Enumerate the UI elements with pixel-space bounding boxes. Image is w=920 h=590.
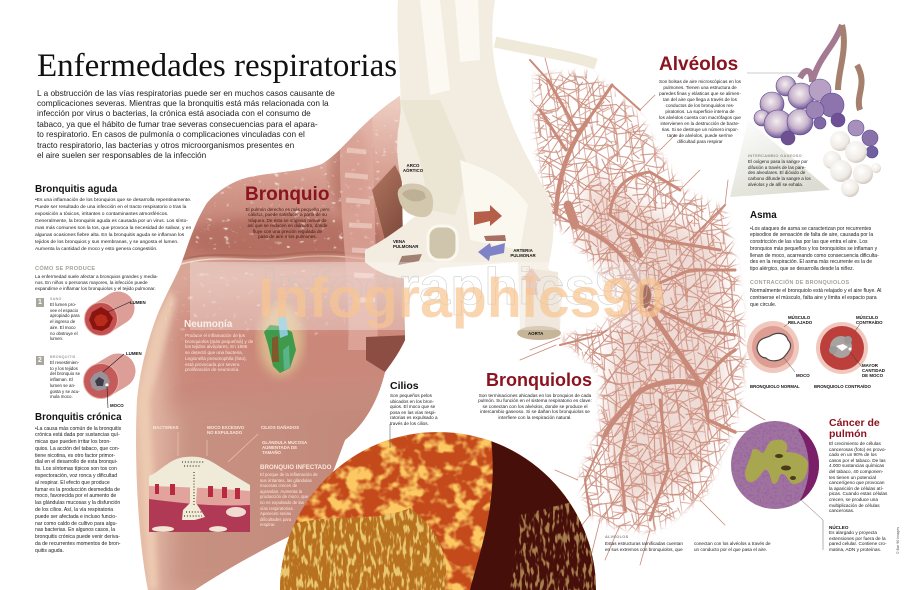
label: arco aortico: AÓRTICO bbox=[403, 168, 423, 173]
text: alveolos: Son bolsas de aire microscópicas en los bbox=[659, 79, 741, 84]
text: neumonia: los tejidos alveolares. En 1886 bbox=[185, 344, 247, 349]
text: contraccion bbox=[750, 288, 882, 308]
text: bronquio infectado: mucosas crecen de bbox=[260, 483, 297, 488]
text: intercambio gaseoso: carbono difunde la sangre a los bbox=[748, 176, 811, 181]
text: bronquitis aguda: •Es una inflamación de los bronquios que se desarrolla repentinamente. bbox=[35, 198, 191, 203]
text: bronquitis cronica: fumar es la producción desmedida de bbox=[35, 487, 120, 493]
label: bronquiolo contraido: BRONQUIOLO CONTRAÍDO bbox=[814, 384, 871, 389]
text: alveolos bbox=[659, 79, 741, 144]
text: cancer de pulmon bbox=[829, 441, 888, 513]
text: bronquio infectado: vías respiratorias. bbox=[260, 506, 294, 511]
text: bronquitis cronica: de los cilios. Así, la vía respiratoria bbox=[35, 507, 113, 513]
text: alveolos: paredes finas y elásticas que se alimen- bbox=[659, 91, 741, 96]
text: neumonia: bronquiolos (más pequeños) y de bbox=[185, 339, 253, 344]
intro paragraph: el aire suelen ser responsables de la infección bbox=[37, 151, 206, 160]
text: nucleo: matina, ADN y proteínas. bbox=[829, 547, 881, 552]
text: alveolos: pulmones. Tienen una estructura de bbox=[663, 85, 737, 90]
step 1: no obstruye el bbox=[50, 331, 78, 336]
text: cancer de pulmon: cancerígeno que provocan bbox=[829, 480, 885, 485]
text: bronquiolos: pulmón. Su función en el sistema respiratorio es clave: bbox=[478, 398, 592, 403]
heading: bronquitis cronica: Bronquitis crónica bbox=[35, 412, 122, 423]
text: bronquitis cronica: tiene nicotina, es otro factor primor- bbox=[35, 453, 115, 459]
bronchus tube 2: inflamed bbox=[84, 354, 124, 408]
heading: como se produce: CÓMO SE PRODUCE bbox=[35, 266, 95, 272]
heading: bronquio infectado: BRONQUIO INFECTADO bbox=[260, 464, 331, 471]
step 2: inflaman. El bbox=[50, 377, 73, 382]
step 1: 1 bbox=[38, 299, 42, 306]
text: bronquitis aguda: tejidos de los bronquios y sus membranas, y se angosta el lumen. bbox=[35, 240, 178, 245]
bronchus tube 1: healthy bbox=[84, 302, 130, 336]
text: alveolos: tante de alvéolos, puede ser/me bbox=[667, 133, 733, 138]
text: como se produce: nos. En niños o personas mayores, la infección puede bbox=[35, 280, 148, 285]
label: glandula mucosa: AUMENTADA DE bbox=[262, 445, 297, 450]
text: alveolos: conductos de los bronquiolos res- bbox=[666, 103, 734, 108]
text: bronquio infectado: no es expulsado de las bbox=[260, 500, 304, 505]
text: cancer de pulmon: El crecimiento de células bbox=[829, 441, 881, 446]
text: bronquitis aguda: exposición a tóxicos, irritantes o contaminantes atmosféricos. bbox=[35, 212, 168, 217]
text: bronquitis cronica: tis. Los síntomas típicos son tos con bbox=[35, 466, 117, 472]
text: como se produce: La enfermedad suele afectar a bronquios grandes y media- bbox=[35, 274, 158, 279]
text: bronquitis cronica: crónica está dada por sustancias quí- bbox=[35, 432, 120, 438]
text: intercambio gaseoso bbox=[748, 159, 811, 187]
text: bronquitis cronica: quios. La acción del tabaco, que con- bbox=[35, 446, 119, 452]
label: mayor cantidad de moco bbox=[862, 363, 885, 378]
text: nucleo: pared celular. Contiene cro- bbox=[829, 541, 887, 546]
gas exchange callout panel bbox=[730, 120, 830, 197]
label: musculo contraido bbox=[856, 314, 883, 325]
text: bronquio: paso de aire a los pulmones. bbox=[258, 234, 317, 239]
label: moco excesivo: MOCO EXCESIVO bbox=[207, 425, 244, 430]
label: musculo relajado: RELAJADO bbox=[788, 320, 812, 325]
text: contraccion: contraerse el músculo, falta aire y limita el espacio para bbox=[750, 294, 877, 300]
text: bronquitis aguda: Generalmente, la bronquitis aguda es causada por un virus. Los sínto- bbox=[35, 219, 188, 224]
text: nucleo: Es alargado y proyecta bbox=[829, 530, 877, 535]
text: asma: •Los ataques de asma se caracterizan por recurrentes bbox=[750, 226, 871, 232]
text: cilios: ubicados en los bron- bbox=[390, 399, 434, 404]
text: bronquio: tráquea. De ésta se originan ramas de bbox=[248, 218, 327, 223]
text: bronquitis cronica: quitis aguda. bbox=[35, 548, 64, 554]
text: neumonia bbox=[185, 333, 253, 372]
label: lumen 2: LUMEN bbox=[126, 350, 142, 356]
text: neumonia: proliferación de neumonía. bbox=[185, 367, 239, 372]
heading: cancer de pulmon bbox=[829, 417, 880, 440]
text: bronquitis aguda: mas más comunes son la tos, que provoca la necesidad de salivar, y en bbox=[35, 226, 191, 231]
text: bronquitis cronica: •La causa más común de la bronquitis bbox=[35, 426, 121, 432]
neumonia micrograph bbox=[259, 304, 303, 376]
text: alveolares column 2: conectan con los alvéolos a través de bbox=[694, 541, 771, 546]
text: alveolares column 2 bbox=[694, 541, 771, 552]
text: bronquitis cronica: puede ser afectada e incluso funcio- bbox=[35, 514, 117, 520]
text: bronquiolos: intercambio gaseoso. Si se dañan los bronquiolos se bbox=[480, 409, 590, 414]
label: musculo contraido: CONTRAÍDO bbox=[856, 320, 883, 325]
bronchiole contracted diagram bbox=[816, 322, 868, 374]
text: alveolos: intervienen en la destrucción de bacte- bbox=[661, 121, 739, 126]
text: bronquitis cronica: da de recurrentes momentos de bron- bbox=[35, 541, 121, 547]
text: bronquio: así que se reducen en diámetro, donde bbox=[248, 223, 327, 228]
label: moco: MOCO bbox=[110, 402, 124, 408]
intro paragraph: tracto respiratorio, las bacterias y otros microorganismos presentes en bbox=[37, 141, 294, 150]
label: bacterias: BACTERIAS bbox=[153, 425, 179, 430]
text: como se produce bbox=[35, 274, 158, 291]
intro paragraph: to respiratorio. En casos de pulmonía o complicaciones vinculadas con el bbox=[37, 130, 305, 139]
text: bronquio infectado: El porque de la inflamación de bbox=[260, 472, 318, 477]
text: bronquio: El pulmón derecho es más pequeño pero bbox=[245, 207, 330, 212]
step 2: El revestimien- bbox=[50, 360, 79, 365]
heading: bronquitis aguda: Bronquitis aguda bbox=[35, 184, 117, 195]
label: mayor cantidad de moco: CANTIDAD bbox=[862, 368, 885, 373]
step 1: SANO bbox=[50, 297, 62, 301]
intro paragraph: infección por virus o bacterias, la crónica está asociada con el consumo de bbox=[37, 109, 311, 118]
step 2: del bronquio se bbox=[50, 371, 80, 376]
step 2: BRONQUITIS bbox=[50, 355, 76, 359]
text: bronquio infectado: dificultades para bbox=[260, 517, 291, 522]
infected bronchus cross-section bbox=[149, 432, 258, 532]
label: mayor cantidad de moco: MAYOR bbox=[862, 363, 878, 368]
text: asma: constricción de las vías por las que entra el aire. Los bbox=[750, 239, 868, 245]
label: arco aortico: ARCO bbox=[407, 163, 419, 168]
text: cancer de pulmon: multiplicación de células bbox=[829, 503, 880, 508]
watermark: Infographics90 bbox=[262, 258, 657, 316]
cancer cell micrograph bbox=[731, 421, 823, 550]
label: moco excesivo: NO EXPULSADO bbox=[207, 430, 242, 435]
text: cilios: ratorias es expulsado a bbox=[390, 415, 438, 420]
label: cilios danados: CILIOS DAÑADOS bbox=[261, 425, 299, 430]
text: bronquitis aguda: Aumenta la cantidad de moco y esto genera congestión. bbox=[35, 247, 157, 252]
text: bronquitis cronica: moco, favorecida por el aumento de bbox=[35, 493, 116, 499]
label: arco aortico bbox=[403, 163, 423, 173]
step 1: lumen. bbox=[50, 336, 63, 341]
heading: neumonia: Neumonía bbox=[184, 319, 232, 330]
bronchiole tree bbox=[520, 58, 766, 566]
text: bronquiolos bbox=[478, 392, 592, 420]
label: moco asma: MOCO bbox=[796, 373, 810, 378]
text: asma bbox=[750, 226, 879, 272]
text: bronquio bbox=[245, 207, 330, 239]
text: alveolares column 1: Estas estructuras ramificadas cuentan bbox=[605, 541, 683, 546]
label: glandula mucosa: TAMAÑO bbox=[262, 450, 281, 455]
step 2: gosta y se acu- bbox=[50, 389, 80, 394]
intro paragraph: L a obstrucción de las vías respiratorias puede ser en muchos casos causante de bbox=[37, 88, 335, 98]
text: bronquiolos: Son terminaciones ahicadas en los bronquios de cada bbox=[479, 392, 591, 398]
text: cilios: Son pequeños pelos bbox=[390, 393, 432, 398]
text: bronquio infectado bbox=[260, 472, 318, 527]
text: nucleo: extensiones por fuera de la bbox=[829, 536, 886, 541]
intro paragraph bbox=[37, 88, 335, 160]
label: aorta: AORTA bbox=[528, 331, 543, 336]
text: asma: des en la respiración. El asma más recurrente es la de bbox=[750, 259, 872, 265]
label: arteria pulmonar: PULMONAR bbox=[510, 253, 536, 258]
alveoli cluster bbox=[754, 25, 881, 197]
text: bronquio infectado: agrandan. Aumenta la bbox=[260, 489, 302, 494]
text: cilios: quios. El moco que se bbox=[390, 404, 435, 409]
text: bronquio infectado: respirar. bbox=[260, 522, 276, 527]
text: bronquitis cronica: nas bacterias. En algunos casos, la bbox=[35, 527, 115, 533]
text: asma: episodios de sensación de falta de aire, causada por la bbox=[750, 232, 873, 238]
step 2 bbox=[36, 355, 80, 399]
label: musculo relajado bbox=[788, 314, 812, 325]
step 2: lumen se an- bbox=[50, 383, 75, 388]
bronchiole normal diagram bbox=[747, 321, 799, 373]
text: alveolos: los alvéolos cuenta con macrófagos que bbox=[659, 115, 741, 120]
text: intercambio gaseoso: alvéolos y de allí se exhala. bbox=[748, 182, 803, 187]
text: neumonia: Produce el inflamación de los bbox=[185, 333, 245, 338]
watermark band bbox=[190, 262, 640, 330]
text: bronquitis cronica: micas que pueden irritar los bron- bbox=[35, 439, 111, 445]
title: Enfermedades respiratorias bbox=[37, 48, 397, 84]
text: bronquio infectado: sus irritantes, las glándulas bbox=[260, 478, 312, 483]
heading: nucleo: NÚCLEO bbox=[829, 524, 848, 530]
label: musculo contraido: MÚSCULO bbox=[856, 315, 878, 320]
label: vena pulmonar: VENA bbox=[393, 239, 405, 244]
step 1 bbox=[36, 297, 80, 341]
text: alveolos: rias. Si se destruye un número impor- bbox=[662, 127, 738, 132]
text: asma: llenan de moco, acarreando como consecuencia dificulta- bbox=[750, 253, 879, 259]
text: neumonia: se detectó que una bacteria, bbox=[185, 350, 243, 355]
text: neumonia: está provocada por severa bbox=[185, 362, 239, 367]
text: cancer de pulmon: crecen, se produce una bbox=[829, 497, 878, 502]
step 2: mula moco. bbox=[50, 394, 73, 399]
text: bronquitis cronica: dial en el desarrollo de esta bronqui- bbox=[35, 459, 117, 465]
heading: contraccion de bronquiolos: CONTRACCIÓN DE BRONQUIOLOS bbox=[750, 280, 849, 286]
text: cancer de pulmon: picas. Cuando estas células bbox=[829, 491, 887, 496]
text: bronquitis cronica: al respirar. El efecto que produce bbox=[35, 480, 110, 486]
text: cancer de pulmon: la aparición de células atí- bbox=[829, 486, 883, 491]
text: bronquitis cronica: las glándulas mucosas y la disfunción bbox=[35, 500, 120, 506]
heading: bronquiolos: Bronquiolos bbox=[486, 370, 592, 390]
watermark: Infographics90 bbox=[258, 266, 665, 329]
text: bronquitis aguda bbox=[35, 198, 191, 252]
heading: bronquio: Bronquio bbox=[245, 184, 329, 205]
text: cancer de pulmon: tes tienen un potencial bbox=[829, 475, 876, 480]
text: contraccion: que circule. bbox=[750, 302, 776, 308]
step 2: 2 bbox=[38, 357, 42, 364]
text: neumonia: Legionella pneumophila (foto), bbox=[185, 356, 247, 361]
text: cancer de pulmon: cado en un 90% de los bbox=[829, 452, 877, 457]
label: bronquiolo normal: BRONQUIOLO NORMAL bbox=[750, 384, 800, 389]
text: alveolos: dificultad para respirar bbox=[677, 139, 723, 144]
step 1: El lumen pro- bbox=[50, 302, 76, 307]
label: arteria pulmonar bbox=[510, 248, 536, 258]
heading: cancer de pulmon: pulmón bbox=[829, 428, 867, 440]
credit: © Bar 90 Images bbox=[896, 527, 900, 554]
text: cancer de pulmon: casos por el tabaco. De las bbox=[829, 458, 886, 463]
intro paragraph: complicaciones severas. Mientras que la bronquitis está más relacionada con la bbox=[37, 99, 329, 108]
text: asma: tipo alérgico, que se desarrolla desde la niñez. bbox=[750, 266, 854, 272]
heading: intercambio gaseoso: INTERCAMBIO GASEOSO bbox=[748, 153, 802, 158]
text: alveolos: piratorios. La superficie interna de bbox=[665, 109, 735, 114]
text: bronquitis cronica: bronquitis crónica puede venir deriva- bbox=[35, 534, 120, 540]
intro paragraph: tabaco, ya que el hábito de fumar trae severas consecuencias para el apara- bbox=[37, 120, 318, 129]
text: contraccion: Normalmente el bronquiolo está relajado y el aire fluye. Al bbox=[750, 288, 881, 294]
label: vena pulmonar bbox=[393, 239, 418, 249]
step 2: to y los tejidos bbox=[50, 366, 78, 371]
text: bronquitis aguda: Puede ser resultado de una infección en el tracto respiratorio o tras la bbox=[35, 205, 186, 210]
text: como se produce: expandirse e inflamar los bronquiolos y el tejido pulmonar. bbox=[35, 286, 156, 291]
step 1: apropiado para bbox=[50, 313, 80, 318]
heading: cancer de pulmon: Cáncer de bbox=[829, 417, 880, 429]
text: bronquiolos: interfiere con la respiración natural. bbox=[498, 415, 572, 420]
label: glandula mucosa bbox=[262, 440, 307, 455]
text: cilios: posa en las vías respi- bbox=[390, 410, 436, 415]
micrograph of cilia bbox=[275, 430, 600, 590]
text: alveolares column 1: en sus extremos con bronquiolos, que bbox=[605, 546, 683, 552]
label: mayor cantidad de moco: DE MOCO bbox=[862, 373, 883, 378]
heading: alveolares: ALVEOLOS bbox=[605, 534, 629, 539]
label: vena pulmonar: PULMONAR bbox=[393, 244, 418, 249]
step 1: vee el espacio bbox=[50, 308, 78, 313]
text: cancer de pulmon: cancerosas (foto) es provo- bbox=[829, 447, 886, 452]
text: cancer de pulmon: del tabaco, 40 componen- bbox=[829, 469, 883, 474]
text: bronquitis cronica: nar como caldo de cultivo para algu- bbox=[35, 521, 117, 527]
label: moco excesivo bbox=[207, 425, 244, 435]
heading: asma: Asma bbox=[750, 210, 777, 221]
text: cilios: través de los cilios. bbox=[390, 421, 429, 426]
text: bronquitis cronica: expectoración, voz ronca y dificultad bbox=[35, 473, 117, 479]
text: bronquio: cálidos, puede satisfacer a partir de su bbox=[248, 212, 327, 217]
label: lumen 1: LUMEN bbox=[130, 300, 146, 304]
label: musculo relajado: MÚSCULO bbox=[788, 315, 810, 320]
text: bronquitis aguda: algunas ocasiones fiebre alta. En la bronquitis aguda se inflaman los bbox=[35, 233, 184, 238]
text: asma: bronquios más pequeños y los bronquiolos se inflaman y bbox=[750, 246, 877, 252]
left lung bbox=[130, 90, 425, 590]
text: bronquiolos: se conectan con los alvéolos, donde se produce el bbox=[482, 404, 588, 409]
text: intercambio gaseoso: difusión a través de las pare- bbox=[748, 165, 806, 170]
text: bronquio: fluye con una presión regulada de bbox=[253, 229, 322, 234]
text: bronquio infectado: producción de moco, que bbox=[260, 494, 308, 499]
text: alveolos: tan del aire que llega a través de los bbox=[663, 97, 737, 102]
text: intercambio gaseoso: des alveolares. El dióxido de bbox=[748, 170, 805, 175]
heading: cilios: Cilios bbox=[390, 380, 419, 392]
text: bronquitis cronica bbox=[35, 426, 121, 554]
heading: alveolos: Alvéolos bbox=[659, 54, 738, 75]
text: cancer de pulmon: 4.000 sustancias químicas bbox=[829, 463, 884, 468]
trachea and mediastinal vessels bbox=[365, 0, 596, 340]
label: glandula mucosa: GLÁNDULA MUCOSA bbox=[262, 440, 307, 445]
text: bronquio infectado: Aparecen serias bbox=[260, 511, 291, 516]
text: nucleo bbox=[829, 530, 887, 552]
text: alveolares column 1 bbox=[605, 541, 683, 552]
step 1: aire. El moco bbox=[50, 325, 76, 330]
label: arteria pulmonar: ARTERIA bbox=[513, 248, 533, 253]
text: alveolares column 2: un conducto por el que pasa el aire. bbox=[694, 546, 767, 552]
step 1: el ingreso de bbox=[50, 319, 75, 324]
text: intercambio gaseoso: El oxígeno pasa la sangre por bbox=[748, 159, 808, 164]
text: cilios bbox=[390, 393, 438, 426]
text: cancer de pulmon: cancerosas. bbox=[829, 508, 854, 513]
